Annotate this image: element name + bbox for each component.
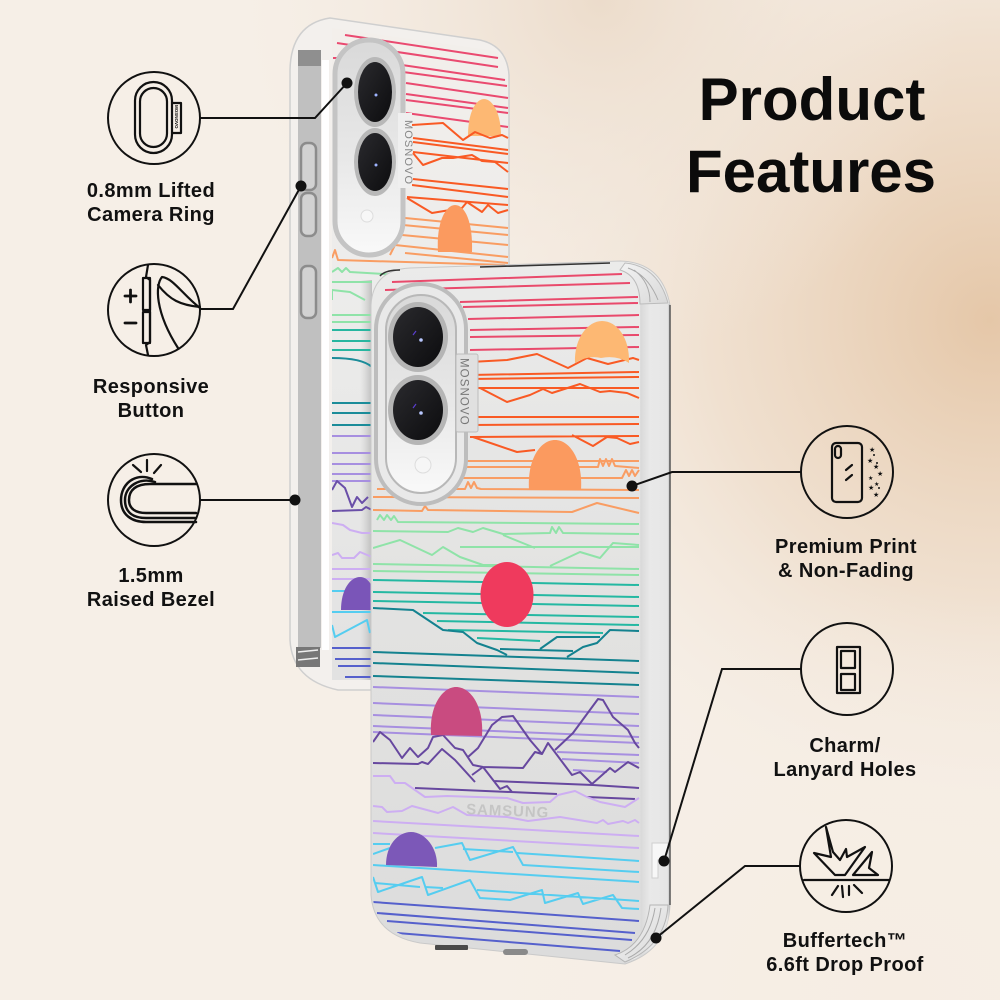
- label: raised bezel: [87, 565, 215, 611]
- icon: premium print: ★: [867, 457, 873, 465]
- front phone case: [371, 261, 670, 964]
- back phone print area: [332, 28, 508, 680]
- corner detail top right: [620, 263, 668, 304]
- leader line: charm holes: [658, 669, 801, 866]
- back phone sun purple: [341, 577, 370, 610]
- feature: charm holes: [658, 623, 917, 866]
- leader line: raised bezel: [200, 494, 300, 506]
- sun magenta: [431, 687, 482, 736]
- back phone print lines: [332, 35, 508, 677]
- icon: charm holes: [801, 623, 893, 715]
- camera tab: [456, 354, 478, 432]
- lens bottom: [388, 375, 448, 445]
- back phone case: [290, 18, 509, 690]
- back lens top: [354, 57, 396, 127]
- back MOSNOVO text: MOSNOVO: [402, 120, 414, 185]
- title: [686, 66, 936, 205]
- back phone shell: [290, 18, 509, 690]
- charm hole tabs: [652, 843, 668, 878]
- icon: camera ring: MOSNOVO: [174, 105, 179, 129]
- title: Features: [686, 138, 936, 205]
- label: camera ring: 0.8mm Lifted: [87, 180, 215, 202]
- label: camera ring: [87, 180, 215, 226]
- side buttons: [301, 143, 316, 318]
- lens top: [388, 302, 448, 372]
- icon: drop proof: [800, 820, 892, 912]
- icon: camera ring: [108, 72, 200, 164]
- label: raised bezel: Raised Bezel: [87, 589, 215, 611]
- back phone sun top: [468, 99, 501, 136]
- label: drop proof: 6.6ft Drop Proof: [766, 954, 924, 976]
- title: Product: [699, 66, 925, 133]
- back phone camera module: [335, 40, 414, 255]
- icon: premium print: ★: [873, 463, 879, 471]
- sun orange middle: [529, 440, 581, 490]
- back phone sun middle: [438, 205, 472, 252]
- back camera tab: [398, 113, 412, 188]
- icon: premium print: ★: [873, 491, 879, 499]
- feature: premium print: [626, 426, 917, 582]
- sun red: [480, 562, 534, 627]
- back flash: [361, 210, 373, 222]
- sun orange top: [575, 321, 629, 363]
- label: charm holes: [773, 735, 917, 781]
- front phone print lines: [373, 274, 639, 951]
- label: premium print: [775, 536, 917, 582]
- feature: raised bezel: [87, 454, 300, 611]
- SAMSUNG logo: SAMSUNG: [466, 801, 549, 822]
- MOSNOVO text: MOSNOVO: [458, 358, 470, 426]
- sun purple: [386, 832, 437, 867]
- feature: drop proof: [650, 820, 924, 976]
- label: responsive button: Responsive: [93, 376, 209, 398]
- label: premium print: Premium Print: [775, 536, 917, 558]
- back lens bottom: [354, 128, 396, 196]
- icon: premium print: ★: [869, 446, 875, 454]
- icon: premium print: ★: [877, 470, 883, 478]
- icon: premium print: ★: [874, 481, 879, 488]
- label: charm holes: Lanyard Holes: [773, 759, 917, 781]
- label: drop proof: [766, 930, 924, 976]
- front phone shell: [371, 261, 670, 964]
- label: premium print: & Non-Fading: [778, 560, 914, 582]
- label: responsive button: [93, 376, 209, 422]
- back phone side strip: [298, 50, 321, 648]
- label: charm holes: Charm/: [809, 735, 881, 757]
- leader line: camera ring: [200, 78, 352, 118]
- front phone shadow on back phone: [360, 280, 372, 680]
- label: responsive button: Button: [118, 400, 184, 422]
- front right side strip: [620, 304, 670, 962]
- feature: camera ring: [87, 72, 352, 226]
- label: raised bezel: 1.5mm: [118, 565, 184, 587]
- flash: [415, 457, 431, 473]
- icon: premium print: [801, 426, 893, 518]
- label: camera ring: Camera Ring: [87, 204, 215, 226]
- icon: responsive button: [108, 264, 200, 356]
- leader line: responsive button: [200, 180, 306, 309]
- bottom speaker and port: [435, 945, 528, 955]
- leader line: drop proof: [650, 866, 800, 944]
- leader line: premium print: [626, 472, 801, 492]
- corner detail bottom right: [615, 905, 668, 962]
- icon: premium print: ★: [868, 475, 873, 482]
- icon: raised bezel: [108, 454, 200, 546]
- front camera module: [376, 284, 478, 504]
- feature: responsive button: [93, 180, 306, 422]
- icon: premium print: ★: [868, 484, 874, 492]
- label: drop proof: Buffertech™: [783, 930, 907, 952]
